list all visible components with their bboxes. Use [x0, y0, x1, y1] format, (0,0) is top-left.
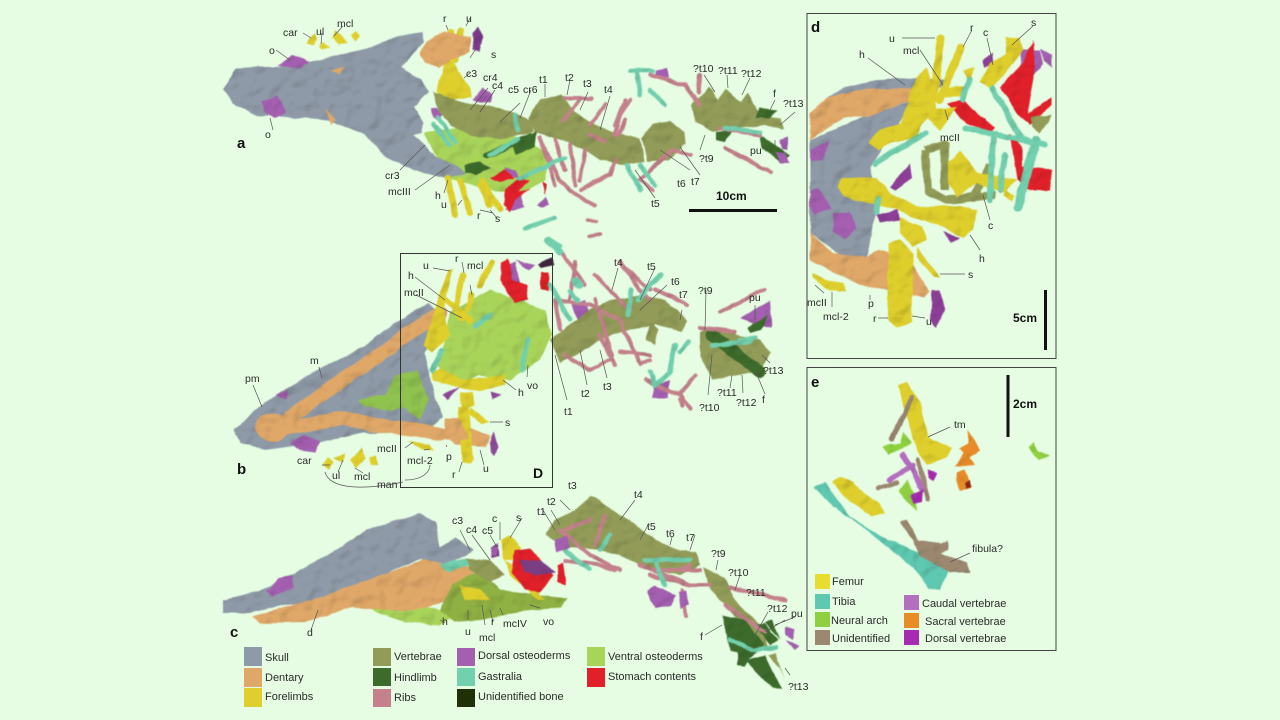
legend: main: Ribs — [394, 692, 417, 704]
labels b: ul — [332, 470, 340, 482]
labels d: p — [868, 298, 874, 310]
labels c: c — [492, 513, 497, 525]
panel: e, juvenile bones and legend — [807, 368, 1056, 650]
forelimb d — [868, 68, 937, 150]
gastralia c — [565, 535, 775, 650]
labels a: s — [495, 213, 500, 225]
labels a: h — [435, 190, 441, 202]
ribs c — [560, 515, 785, 632]
cervical vertebrae — [432, 92, 534, 140]
legend e: Caudal vertebrae — [922, 598, 1006, 610]
labels d: s — [968, 269, 973, 281]
labels c: ?t10 — [728, 567, 749, 579]
labels c: t6 — [666, 528, 675, 540]
legend: main: Vertebrae — [394, 651, 442, 663]
legend e: Tibia — [832, 596, 856, 608]
labels a: o — [269, 45, 275, 57]
labels b: pm — [245, 373, 260, 385]
labels a: c4 — [492, 80, 503, 92]
small green osteoderms — [358, 370, 428, 420]
labels a: t1 — [539, 74, 548, 86]
labels b: mcl — [354, 471, 370, 483]
labels c: ?t12 — [767, 603, 788, 615]
labels c: t4 — [634, 489, 643, 501]
labels a: r — [477, 210, 481, 222]
purple near pelvis — [505, 68, 790, 177]
dorsal vertebrae — [910, 470, 937, 504]
labels c: t3 — [568, 480, 577, 492]
labels b: h — [408, 270, 414, 282]
femur lower — [832, 477, 885, 517]
labels a: t4 — [604, 84, 613, 96]
labels a: mcIII — [388, 186, 411, 198]
labels b: ?t9 — [698, 285, 713, 297]
labels b: r — [452, 469, 456, 481]
gastralia b — [432, 275, 755, 385]
labels b — [245, 253, 784, 491]
legend: main: Forelimbs — [265, 691, 314, 703]
femur upper — [898, 383, 952, 465]
panel: c, lateral view of skeleton — [223, 480, 809, 693]
labels b: t4 — [614, 257, 623, 269]
labels c: mcl — [479, 632, 495, 644]
legend: main: Dorsal osteoderms — [478, 650, 571, 662]
panel: b, ventral view of skeleton — [233, 240, 784, 491]
labels a: cr4 — [483, 72, 498, 84]
labels c: u — [465, 626, 471, 638]
?t9-?t13 vertebrae — [692, 87, 784, 132]
labels b: mcII — [377, 443, 397, 455]
labels a: f — [773, 88, 776, 100]
purple c — [490, 536, 800, 650]
neural arch pieces — [883, 432, 1050, 510]
labels c: t7 — [686, 532, 695, 544]
labels a: cr6 — [523, 84, 538, 96]
legend: main: Stomach contents — [608, 671, 697, 683]
legend e: Dorsal vertebrae — [925, 633, 1006, 645]
ventral osteoderm mass — [437, 290, 552, 385]
labels b: man — [377, 479, 398, 491]
scale bar 2cm: 2cm — [1013, 397, 1037, 411]
D inset box — [400, 254, 552, 488]
legend: main — [244, 647, 703, 707]
dentary d — [810, 88, 912, 140]
labels a: ?t13 — [783, 98, 804, 110]
hindlimb c — [722, 615, 782, 690]
labels b: t7 — [679, 289, 688, 301]
labels b: s — [505, 417, 510, 429]
skull b — [233, 303, 445, 450]
labels d: c — [988, 220, 993, 232]
labels a: ul — [316, 26, 324, 38]
forelimbs — [423, 270, 453, 353]
labels a: t5 — [651, 198, 660, 210]
leader lines e — [928, 427, 970, 562]
stomach contents — [490, 170, 547, 212]
caudal vertebrae — [890, 455, 922, 490]
labels c: t1 — [537, 506, 546, 518]
labels a: t2 — [565, 72, 574, 84]
labels d: c — [983, 27, 988, 39]
labels d: h — [859, 49, 865, 61]
ribs — [540, 75, 770, 205]
labels c: vo — [543, 616, 554, 628]
lime ventral osteoderms — [424, 125, 547, 195]
labels b: mcII — [404, 287, 424, 299]
panel: d, close-up of forelimb — [807, 14, 1056, 358]
labels b: u — [423, 260, 429, 272]
specimen a: shapes — [223, 26, 790, 246]
panel letter d: d — [811, 19, 820, 36]
labels b: t3 — [603, 381, 612, 393]
labels c: t5 — [647, 521, 656, 533]
labels a: t7 — [691, 176, 700, 188]
hindlimb b — [712, 335, 760, 372]
leader lines c — [311, 500, 795, 675]
labels b: ?t11 — [717, 387, 737, 399]
labels b: vo — [527, 380, 538, 392]
legend: main: Hindlimb — [394, 672, 437, 684]
stomach contents d — [947, 40, 1052, 190]
labels d: r — [970, 22, 974, 34]
tibia — [813, 482, 948, 590]
skull — [223, 32, 466, 178]
labels c: c5 — [482, 525, 493, 537]
panel letter b: b — [237, 461, 246, 478]
labels a: s — [491, 49, 496, 61]
legend: main: Skull — [265, 652, 289, 664]
scale bar 10cm — [689, 189, 777, 212]
forelimb and dentary — [445, 30, 465, 100]
legend e: Unidentified — [832, 633, 890, 645]
labels c: f — [700, 631, 703, 643]
labels b: ?t10 — [699, 402, 720, 414]
labels c: ?t13 — [788, 681, 809, 693]
scale bar 5cm — [1013, 290, 1047, 350]
carpals — [307, 30, 360, 49]
labels b: mcl-2 — [407, 455, 433, 467]
scale bar 5cm: 5cm — [1013, 311, 1037, 325]
labels c: mcIV — [503, 618, 527, 630]
labels a: ?t11 — [718, 65, 738, 77]
labels a: t6 — [677, 178, 686, 190]
forelimb c — [460, 535, 545, 600]
labels b: r — [455, 253, 459, 265]
labels b: mcl — [467, 260, 483, 272]
osteoderm — [290, 435, 321, 452]
vertebrae b — [550, 295, 688, 362]
hindlimb — [487, 136, 530, 156]
labels d: mcII — [940, 132, 960, 144]
panel: a, dorsal view of skeleton — [223, 13, 804, 246]
scale bar 10cm: 10cm — [716, 189, 747, 203]
labels b: p — [446, 451, 452, 463]
labels c: d — [307, 627, 313, 639]
dentary Y — [275, 314, 440, 434]
labels a: ?t9 — [699, 153, 714, 165]
labels d: mcl — [903, 45, 919, 57]
labels c: r — [491, 616, 495, 628]
skull d — [810, 77, 950, 260]
labels b: m — [310, 355, 319, 367]
sacral vertebrae — [955, 430, 980, 491]
labels b: t5 — [647, 261, 656, 273]
ribs b — [555, 250, 764, 408]
labels d: r — [873, 313, 877, 325]
labels a — [265, 13, 804, 225]
panel letter c: c — [230, 624, 238, 641]
purple — [443, 387, 502, 456]
labels c: t2 — [547, 496, 556, 508]
labels b: t2 — [581, 388, 590, 400]
vertebrae and ventrals c — [440, 570, 568, 622]
leader lines a — [270, 18, 795, 218]
legend: main: Dentary — [265, 672, 304, 684]
dentary c — [252, 560, 478, 623]
labels c — [307, 480, 809, 693]
humerus — [432, 367, 505, 392]
osteoderms d — [810, 140, 857, 240]
labels b: u — [483, 463, 489, 475]
labels a: u — [441, 199, 447, 211]
labels c: ?t9 — [711, 548, 726, 560]
gastralia d — [875, 80, 1045, 212]
legend e: Femur — [832, 576, 864, 588]
fibula — [900, 519, 970, 572]
labels a: ?t10 — [693, 63, 714, 75]
panel letter a: a — [237, 135, 246, 152]
labels a: r — [443, 13, 447, 25]
labels b: f — [762, 394, 765, 406]
legend: main: Ventral osteoderms — [608, 651, 703, 663]
labels c: h — [442, 616, 448, 628]
ventral osteoderms c — [370, 600, 460, 625]
legend e: Neural arch — [831, 615, 888, 627]
legend e: Sacral vertebrae — [925, 616, 1006, 628]
leader lines b — [253, 262, 770, 487]
leader lines d — [815, 26, 1033, 318]
labels a: u — [466, 13, 472, 25]
labels b: pu — [749, 292, 761, 304]
unidentified sticks — [878, 397, 928, 500]
labels e: tm — [954, 419, 966, 431]
labels d: u — [926, 316, 932, 328]
labels b: ?t12 — [736, 397, 757, 409]
labels a: t3 — [583, 78, 592, 90]
labels a: ?t12 — [741, 68, 762, 80]
labels e — [954, 419, 1003, 555]
vertebrae ring d — [925, 145, 995, 200]
dorsal vertebrae t5-t7 — [642, 122, 686, 162]
labels c: c4 — [466, 524, 477, 536]
labels d: u — [889, 33, 895, 45]
labels a: o — [265, 129, 271, 141]
scale bar 2cm — [1006, 375, 1037, 437]
labels a: cr3 — [385, 170, 400, 182]
labels b: t1 — [564, 406, 573, 418]
labels a: pu — [750, 145, 762, 157]
labels d: s — [1031, 17, 1036, 29]
labels b: h — [518, 387, 524, 399]
labels e: fibula? — [972, 543, 1003, 555]
labels b: ?t13 — [763, 365, 784, 377]
thoracic vertebrae c — [545, 497, 700, 575]
panel letter e: e — [811, 374, 819, 391]
yellow bottom limbs — [448, 178, 500, 215]
legend: main: Gastralia — [478, 671, 523, 683]
legend: main: Unidentified bone — [478, 691, 564, 703]
labels c: s — [516, 512, 521, 524]
dorsal vertebrae t1-t4 — [528, 94, 644, 165]
labels b: car — [297, 455, 312, 467]
red stomach b — [500, 258, 549, 303]
labels d — [807, 17, 1036, 328]
skull c — [223, 513, 474, 613]
labels b: t6 — [671, 276, 680, 288]
labels c: pu — [791, 608, 803, 620]
stomach c — [512, 548, 566, 592]
labels d: mcII — [807, 297, 827, 309]
labels a: mcl — [337, 18, 353, 30]
gastralia — [433, 71, 760, 246]
labels a: c3 — [466, 68, 477, 80]
labels c: c3 — [452, 515, 463, 527]
labels a: c5 — [508, 84, 519, 96]
labels d: h — [979, 253, 985, 265]
labels d: mcl-2 — [823, 311, 849, 323]
inset letter D: D — [533, 465, 543, 481]
labels c: ?t11 — [746, 587, 766, 599]
legend e — [815, 574, 1006, 645]
labels a: car — [283, 27, 298, 39]
